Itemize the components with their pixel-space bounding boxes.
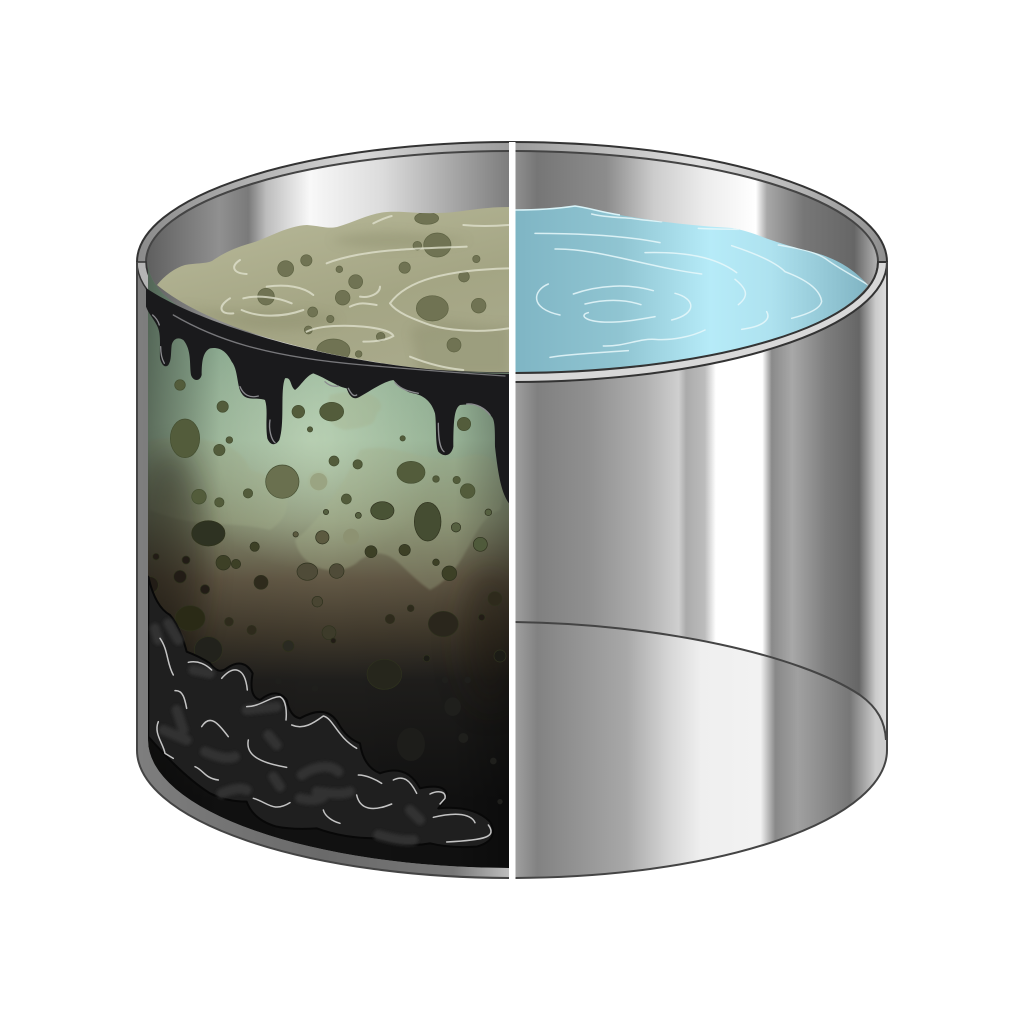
suspended blobs, middle brown zone: [142, 502, 506, 689]
left front rim band: [137, 262, 512, 382]
illustration: split cylindrical tank: [136, 141, 888, 879]
sludge column: [135, 262, 520, 882]
panel: dirty left half: [136, 150, 509, 879]
dark brown haze: [148, 444, 506, 626]
sludge surface: [157, 207, 509, 372]
panel: clean right half: [516, 150, 888, 879]
suspended blobs, upper green zone: [170, 380, 475, 507]
left bottom wall band: [148, 740, 508, 868]
floor back edge: [515, 622, 886, 740]
sediment highlights: [157, 638, 491, 842]
water ripples: [535, 214, 868, 357]
surface ripples: [222, 216, 508, 370]
tar gloss: [153, 315, 505, 452]
right interior wall: [516, 150, 879, 328]
suspended blobs, lower black zone: [401, 734, 502, 804]
right outer body: [516, 274, 886, 731]
surface tone patches: [214, 232, 508, 372]
clean water surface: [515, 200, 875, 380]
tank floor: [637, 632, 886, 869]
right outer side outline: [512, 262, 887, 878]
surface floating blobs: [258, 212, 486, 362]
rim ring, top: [137, 142, 887, 382]
left outer outline: [137, 262, 512, 878]
right rim front band: [512, 262, 887, 382]
pale sludge patches: [201, 394, 486, 590]
sediment lumps: [155, 623, 420, 840]
black sediment mound: [148, 577, 493, 847]
center divider: [509, 142, 516, 882]
black tar band with drips: [146, 288, 509, 503]
water edge highlight: [515, 206, 620, 215]
left outer body base: [137, 262, 512, 878]
left interior wall: [145, 150, 509, 370]
